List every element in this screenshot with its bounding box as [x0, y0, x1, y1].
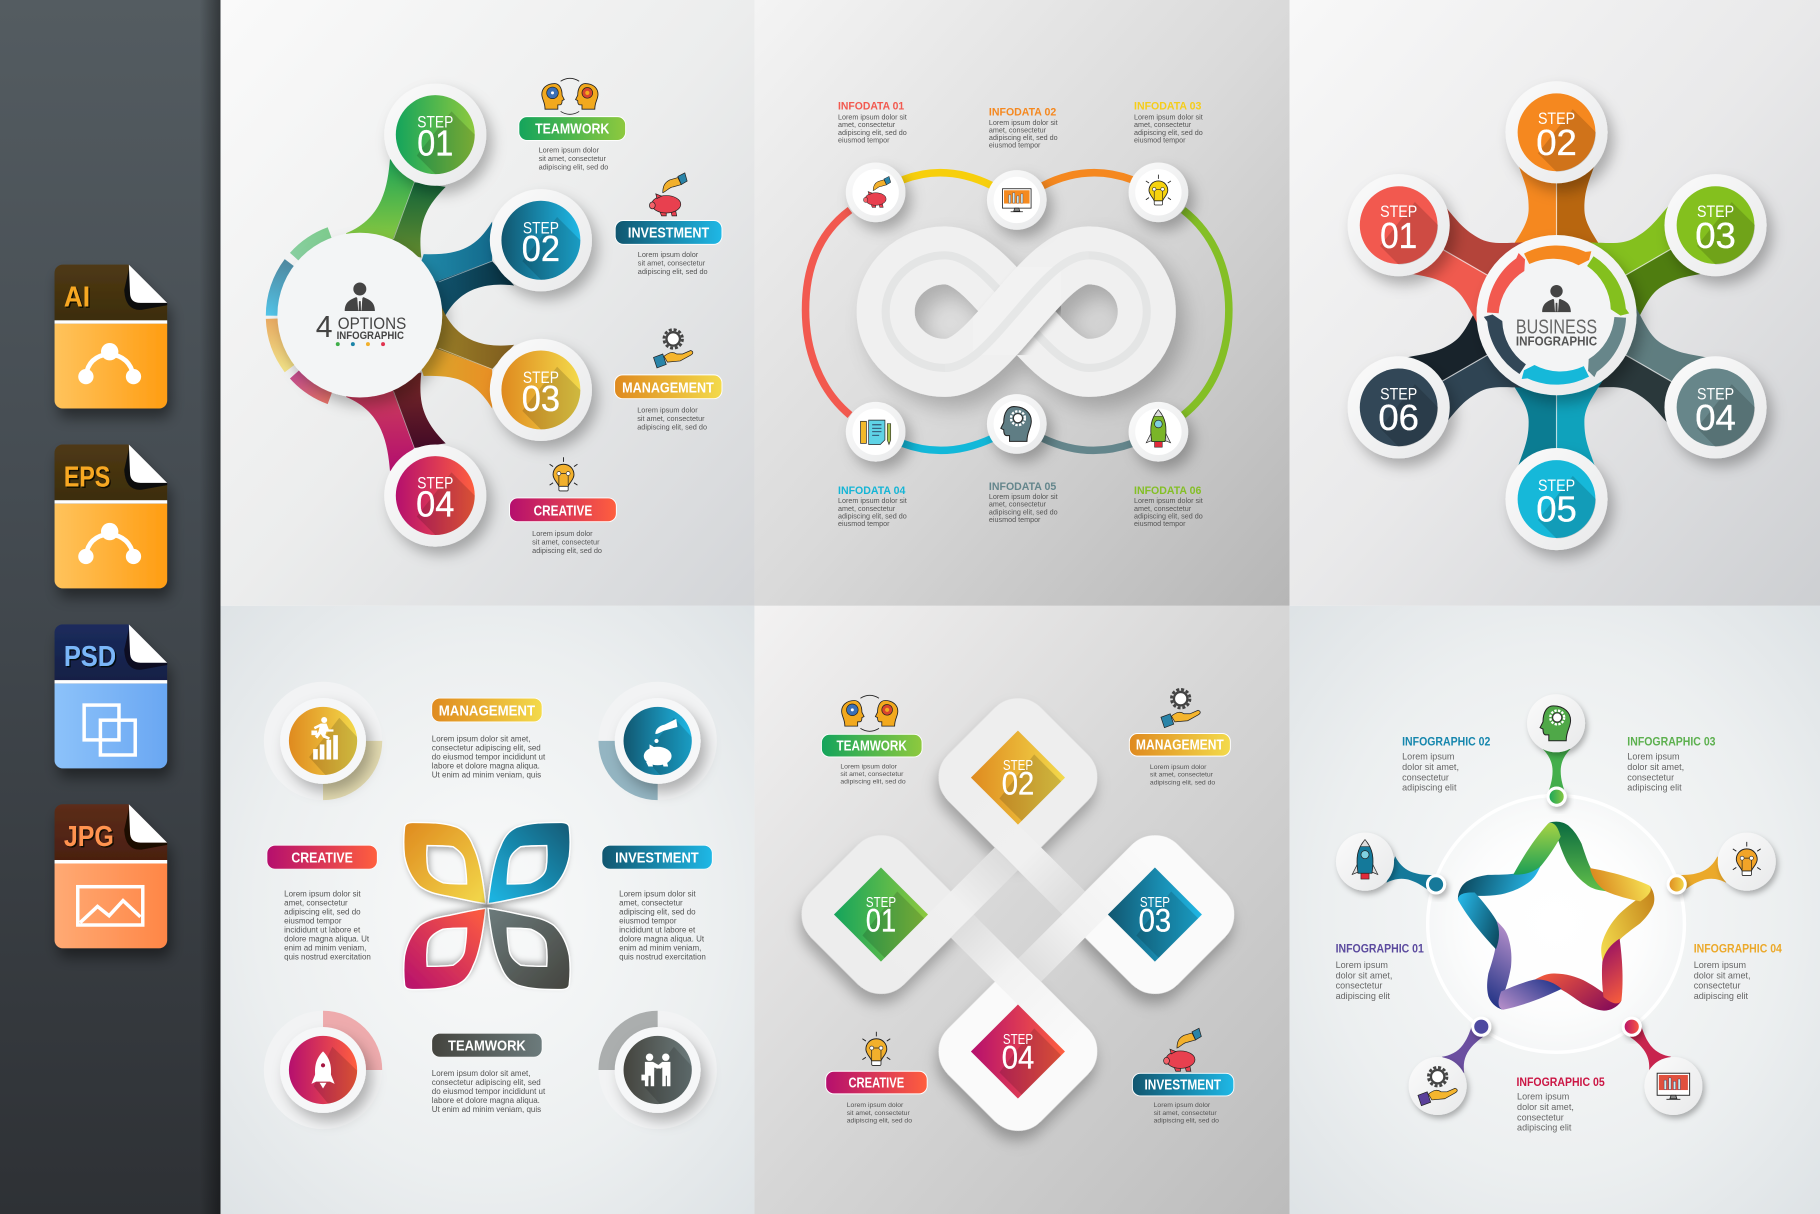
- node: bulb: [1718, 833, 1776, 891]
- label: investment: [615, 221, 722, 244]
- text: infographic 03: [1627, 735, 1716, 793]
- badge: investment: [598, 682, 716, 800]
- text: creative: Lorem ipsum dolor: [847, 1102, 904, 1109]
- text: infodata 03: adipiscing elit, sed do: [1134, 128, 1203, 137]
- text: creative: sit amet, consectetur: [847, 1110, 910, 1117]
- icon: handshake: [641, 1053, 670, 1086]
- label: investment: INVESTMENT: [615, 850, 699, 867]
- text: teamwork: sit amet, consectetur: [539, 154, 606, 163]
- step 01 badge: 01: [417, 123, 453, 164]
- text: infodata 06: eiusmod tempor: [1134, 519, 1186, 528]
- step 01 diamond: [834, 868, 928, 962]
- text: infodata 05: Lorem ipsum dolor sit: [989, 492, 1058, 501]
- label: creative: CREATIVE: [848, 1075, 904, 1091]
- text: infodata 04: [838, 485, 907, 528]
- text: management: consectetur adipiscing elit, sed: [432, 744, 541, 753]
- file icon: PSD: [55, 624, 167, 768]
- step 02 badge: STEP: [1538, 109, 1575, 128]
- text: investment: eiusmod tempor: [619, 917, 677, 926]
- label: teamwork: [821, 734, 922, 757]
- text: infographic 05: [1516, 1075, 1605, 1133]
- text: infodata 05: adipiscing elit, sed do: [989, 507, 1058, 516]
- colored arcs: [806, 173, 1229, 450]
- petals: [404, 822, 570, 990]
- text: infographic 01: consectetur: [1336, 981, 1382, 991]
- text: investment: Lorem ipsum dolor: [638, 250, 699, 259]
- text: investment: enim ad minim veniam,: [619, 944, 701, 953]
- text: infographic 04: Lorem ipsum: [1694, 960, 1746, 970]
- text: teamwork: Lorem ipsum dolor sit amet,: [432, 1069, 530, 1078]
- text: infographic 04: [1694, 941, 1782, 1001]
- text: infodata 03: eiusmod tempor: [1134, 136, 1186, 145]
- text: infographic 04: dolor sit amet,: [1694, 970, 1751, 980]
- text: infographic 02: dolor sit amet,: [1402, 762, 1459, 772]
- text: infographic 04: adipiscing elit: [1694, 991, 1749, 1001]
- step 01 diamond: STEP: [866, 894, 896, 911]
- step 03 diamond: STEP: [1140, 894, 1170, 911]
- text: management: Ut enim ad minim veniam, quis: [432, 771, 541, 780]
- step 02 diamond: 02: [1002, 765, 1034, 801]
- label: management: [1129, 734, 1230, 756]
- label: creative: [826, 1071, 927, 1094]
- label: teamwork: TEAMWORK: [448, 1038, 526, 1055]
- text: management: adipiscing elit, sed do: [1150, 779, 1215, 786]
- text: management: adipiscing elit, sed do: [637, 422, 707, 431]
- text: creative: enim ad minim veniam,: [284, 944, 366, 953]
- text: investment: sit amet, consectetur: [1154, 1110, 1217, 1117]
- step 03 diamond: 03: [1139, 902, 1171, 938]
- text: investment: adipiscing elit, sed do: [619, 908, 696, 917]
- text: creative: adipiscing elit, sed do: [532, 546, 602, 555]
- outer arc segments: [272, 233, 330, 398]
- icon: investment piggy: [649, 173, 687, 216]
- step 01 badge: STEP: [417, 113, 453, 132]
- text: infographic 04: consectetur: [1694, 981, 1740, 991]
- icon: teamwork heads: [842, 695, 898, 731]
- icon: creative bulb: [550, 457, 577, 491]
- text: infodata 03: amet, consectetur: [1134, 120, 1192, 129]
- node dots: [1427, 788, 1685, 1035]
- text: management: labore et dolore magna aliqua.: [432, 762, 540, 771]
- step 03 badge: [488, 339, 604, 456]
- step 06 badge: STEP: [1380, 384, 1417, 403]
- label: creative: [267, 845, 377, 869]
- center hub: BUSINESS: [1516, 317, 1597, 339]
- label: investment: INVESTMENT: [1144, 1078, 1221, 1094]
- step 04 badge: 04: [1695, 397, 1736, 438]
- text: infographic 05: consectetur: [1517, 1112, 1564, 1122]
- text: teamwork: Ut enim ad minim veniam, quis: [432, 1105, 541, 1114]
- text: infographic 01: INFOGRAPHIC 01: [1336, 941, 1424, 955]
- text: infographic 05: Lorem ipsum: [1517, 1092, 1569, 1102]
- text: infodata 01: INFODATA 01: [838, 101, 904, 113]
- text: infographic 04: INFOGRAPHIC 04: [1694, 941, 1782, 955]
- step 02 badge: STEP: [523, 218, 559, 237]
- text: investment: Lorem ipsum dolor: [1154, 1102, 1211, 1109]
- label: management: MANAGEMENT: [439, 703, 536, 720]
- text: infographic 03: consectetur: [1627, 772, 1674, 782]
- text: creative: sit amet, consectetur: [532, 538, 600, 547]
- text: creative: Lorem ipsum dolor sit: [284, 890, 361, 899]
- file icon: EPS: [55, 445, 167, 588]
- text: investment: incididunt ut labore et: [619, 926, 696, 935]
- icon: businessman: [1542, 285, 1571, 312]
- text: infodata 05: eiusmod tempor: [989, 515, 1041, 524]
- step 02 badge: 02: [1536, 122, 1577, 163]
- text: infodata 06: Lorem ipsum dolor sit: [1134, 496, 1203, 505]
- step 04 badge: STEP: [417, 474, 453, 493]
- infinity symbol: [886, 255, 1147, 368]
- text: teamwork: adipiscing elit, sed do: [840, 779, 906, 786]
- panel: knot infographic: [811, 689, 1234, 1125]
- badge: teamwork handshake: [598, 1010, 711, 1126]
- icon: creative bulb: [862, 1032, 890, 1065]
- text: infodata 02: INFODATA 02: [989, 106, 1056, 118]
- text: infographic 02: Lorem ipsum: [1402, 752, 1454, 762]
- text: infodata 04: eiusmod tempor: [838, 519, 890, 528]
- text: management: Lorem ipsum dolor: [1150, 764, 1207, 771]
- text: creative: incididunt ut labore et: [284, 926, 361, 935]
- step 04 badge: 04: [416, 483, 454, 524]
- node: notes: [846, 402, 905, 462]
- badge: management: [264, 682, 382, 800]
- text: infographic 01: [1336, 941, 1424, 1001]
- text: creative: amet, consectetur: [284, 899, 348, 908]
- text: infographic 03: dolor sit amet,: [1627, 762, 1684, 772]
- file icon: AI: [55, 265, 167, 409]
- step 04 badge: STEP: [1697, 384, 1734, 403]
- text: infodata 05: [989, 481, 1058, 524]
- step 05 badge: 05: [1536, 489, 1577, 530]
- text: infographic 02: [1402, 735, 1491, 793]
- text: infodata 02: eiusmod tempor: [989, 141, 1041, 150]
- connectors: [1403, 164, 1710, 466]
- step 04 diamond: STEP: [1003, 1031, 1033, 1048]
- panel: star infographic: [1336, 694, 1782, 1133]
- file icon: EPS: EPS: [64, 461, 110, 493]
- step 03 badge: 03: [1695, 215, 1736, 256]
- icon: hand and piggy: [644, 719, 677, 766]
- icon: management gear hand: [653, 330, 693, 368]
- text: infodata 05: amet, consectetur: [989, 500, 1047, 509]
- text: teamwork: do eiusmod tempor incididunt ut: [432, 1087, 546, 1096]
- text: investment: dolore magna aliqua. Ut: [619, 935, 705, 944]
- text: creative: adipiscing elit, sed do: [284, 908, 361, 917]
- text: teamwork: consectetur adipiscing elit, sed: [432, 1078, 541, 1087]
- text: infographic 05: adipiscing elit: [1517, 1123, 1572, 1133]
- text: infographic 05: INFOGRAPHIC 05: [1516, 1075, 1605, 1089]
- center circle: INFOGRAPHIC: [337, 330, 404, 342]
- node: rocket: [1129, 402, 1188, 462]
- step 02 badge: [490, 190, 604, 306]
- sidebar: [0, 0, 221, 1214]
- label: management: [432, 698, 542, 722]
- text: infodata 04: adipiscing elit, sed do: [838, 511, 907, 520]
- step 03 diamond: [1108, 868, 1202, 962]
- icon: management gear hand: [1161, 689, 1200, 728]
- label: investment: [1132, 1073, 1234, 1096]
- text: teamwork: Lorem ipsum dolor: [539, 146, 600, 155]
- text: management: Lorem ipsum dolor: [637, 406, 698, 415]
- badge: creative rocket: [264, 1010, 382, 1126]
- icon: rocket: [311, 1051, 335, 1089]
- label: creative: [510, 498, 616, 522]
- text: teamwork: Lorem ipsum dolor: [840, 763, 898, 770]
- file icon: JPG: JPG: [64, 821, 114, 853]
- text: infodata 06: INFODATA 06: [1134, 485, 1201, 497]
- text: infodata 02: adipiscing elit, sed do: [989, 133, 1058, 142]
- text: infodata 06: [1134, 485, 1203, 528]
- step 03 badge: 03: [522, 378, 560, 419]
- step 03 badge: STEP: [523, 368, 559, 387]
- text: infodata 04: Lorem ipsum dolor sit: [838, 496, 907, 505]
- file icon: JPG: [55, 804, 167, 948]
- label: creative: CREATIVE: [534, 503, 593, 519]
- step 06 badge: [1346, 356, 1462, 474]
- text: management: sit amet, consectetur: [1150, 772, 1214, 779]
- connectors: [346, 159, 514, 471]
- text: infodata 03: [1134, 101, 1203, 145]
- node: rocket: [1336, 833, 1394, 891]
- text: infographic 03: INFOGRAPHIC 03: [1627, 735, 1716, 749]
- text: investment: amet, consectetur: [619, 899, 683, 908]
- node: head gear: [987, 394, 1047, 454]
- rounded frames: [811, 708, 1225, 1121]
- text: management: Lorem ipsum dolor sit amet,: [432, 735, 530, 744]
- icon: runner and bars: [311, 717, 338, 760]
- node: gear hand: [1409, 1057, 1467, 1115]
- text: infodata 06: amet, consectetur: [1134, 504, 1192, 513]
- text: teamwork: adipiscing elit, sed do: [539, 162, 608, 171]
- woven strips: [890, 787, 1146, 1042]
- text: creative: Lorem ipsum dolor: [532, 529, 593, 538]
- text: infodata 02: Lorem ipsum dolor sit: [989, 118, 1058, 127]
- label: teamwork: TEAMWORK: [837, 739, 907, 755]
- center hub: INFOGRAPHIC: [1516, 333, 1597, 348]
- text: infodata 01: [838, 101, 907, 145]
- step 01 badge: [1346, 175, 1462, 292]
- text: infodata 03: INFODATA 03: [1134, 101, 1201, 113]
- node: bulb: [1129, 162, 1188, 222]
- connectors: [1386, 749, 1726, 1073]
- step 03 badge: STEP: [1697, 202, 1734, 221]
- text: creative: dolore magna aliqua. Ut: [284, 935, 370, 944]
- file icon: AI: AI: [64, 281, 90, 313]
- step 04 badge: [1664, 356, 1780, 474]
- panel: petal infographic: [264, 682, 727, 1140]
- step 02 badge: 02: [522, 228, 560, 269]
- step 04 diamond: [971, 1004, 1065, 1098]
- text: teamwork: labore et dolore magna aliqua.: [432, 1096, 540, 1105]
- step 04 diamond: 04: [1002, 1039, 1034, 1075]
- text: investment: quis nostrud exercitation: [619, 953, 706, 962]
- label: teamwork: TEAMWORK: [535, 121, 610, 137]
- text: infodata 02: amet, consectetur: [989, 125, 1047, 134]
- step 06 badge: 06: [1378, 397, 1419, 438]
- step 05 badge: [1504, 448, 1620, 566]
- step 03 badge: [1664, 174, 1780, 292]
- text: infodata 03: Lorem ipsum dolor sit: [1134, 113, 1203, 122]
- label: investment: [602, 845, 712, 869]
- text: infodata 04: INFODATA 04: [838, 485, 906, 497]
- label: teamwork: [432, 1033, 542, 1057]
- label: management: [615, 375, 722, 399]
- text: infodata 01: amet, consectetur: [838, 120, 896, 129]
- center circle: [277, 233, 442, 398]
- node: head gear: [1527, 694, 1585, 752]
- text: infographic 01: adipiscing elit: [1336, 991, 1390, 1001]
- segment ring: [1479, 246, 1634, 385]
- text: infographic 05: dolor sit amet,: [1517, 1102, 1574, 1112]
- label: management: MANAGEMENT: [622, 380, 714, 396]
- text: infographic 01: dolor sit amet,: [1336, 970, 1392, 980]
- text: creative: quis nostrud exercitation: [284, 953, 371, 962]
- text: infodata 05: INFODATA 05: [989, 481, 1056, 493]
- text: investment: sit amet, consectetur: [638, 258, 706, 267]
- icon: investment piggy: [1164, 1028, 1201, 1071]
- panel: business infographic: [1348, 81, 1801, 585]
- text: infographic 03: Lorem ipsum: [1627, 752, 1680, 762]
- center circle: OPTIONS: [338, 314, 406, 333]
- circle ring: [1428, 795, 1684, 1052]
- node: monitor: [1644, 1057, 1702, 1115]
- text: infographic 02: INFOGRAPHIC 02: [1402, 735, 1491, 749]
- text: infographic 03: adipiscing elit: [1627, 783, 1682, 793]
- file icon: PSD: PSD: [64, 641, 116, 673]
- text: investment: Lorem ipsum dolor sit: [619, 890, 696, 899]
- label: management: MANAGEMENT: [1136, 738, 1224, 754]
- text: infodata 01: Lorem ipsum dolor sit: [838, 113, 907, 122]
- label: creative: CREATIVE: [291, 850, 353, 867]
- label: investment: INVESTMENT: [628, 225, 709, 241]
- center circle: 4: [316, 311, 332, 344]
- step 01 badge: STEP: [1380, 202, 1417, 221]
- text: infographic 02: adipiscing elit: [1402, 783, 1457, 793]
- center hub: [1476, 235, 1637, 395]
- text: management: sit amet, consectetur: [637, 414, 705, 423]
- step 02 badge: [1504, 82, 1620, 198]
- panel: 4 options infographic: [272, 78, 722, 581]
- text: infodata 04: amet, consectetur: [838, 504, 896, 513]
- text: infodata 06: adipiscing elit, sed do: [1134, 511, 1203, 520]
- text: infodata 02: [989, 106, 1058, 150]
- step 02 diamond: STEP: [1003, 757, 1033, 774]
- label: teamwork: [519, 117, 626, 140]
- step 01 diamond: 01: [866, 902, 896, 938]
- text: creative: eiusmod tempor: [284, 917, 342, 926]
- step 01 badge: [382, 84, 499, 202]
- panel: infinity infographic: [806, 101, 1229, 528]
- text: investment: adipiscing elit, sed do: [638, 267, 708, 276]
- step 01 badge: 01: [1380, 215, 1417, 256]
- ribbon star: [1447, 822, 1669, 1037]
- step 05 badge: STEP: [1538, 476, 1575, 495]
- text: infographic 02: consectetur: [1402, 772, 1449, 782]
- icon: businessman: [345, 282, 375, 311]
- text: teamwork: sit amet, consectetur: [840, 771, 904, 778]
- node: monitor: [987, 170, 1047, 230]
- step 04 badge: [383, 444, 499, 562]
- node: piggy: [846, 162, 905, 222]
- icon: teamwork heads: [542, 78, 598, 114]
- text: infographic 01: Lorem ipsum: [1336, 960, 1388, 970]
- text: infodata 01: eiusmod tempor: [838, 136, 890, 145]
- step 02 diamond: [971, 730, 1065, 825]
- text: infodata 01: adipiscing elit, sed do: [838, 128, 907, 137]
- text: management: do eiusmod tempor incididunt ut: [432, 753, 546, 762]
- text: creative: adipiscing elit, sed do: [847, 1118, 912, 1125]
- text: investment: adipiscing elit, sed do: [1154, 1118, 1219, 1125]
